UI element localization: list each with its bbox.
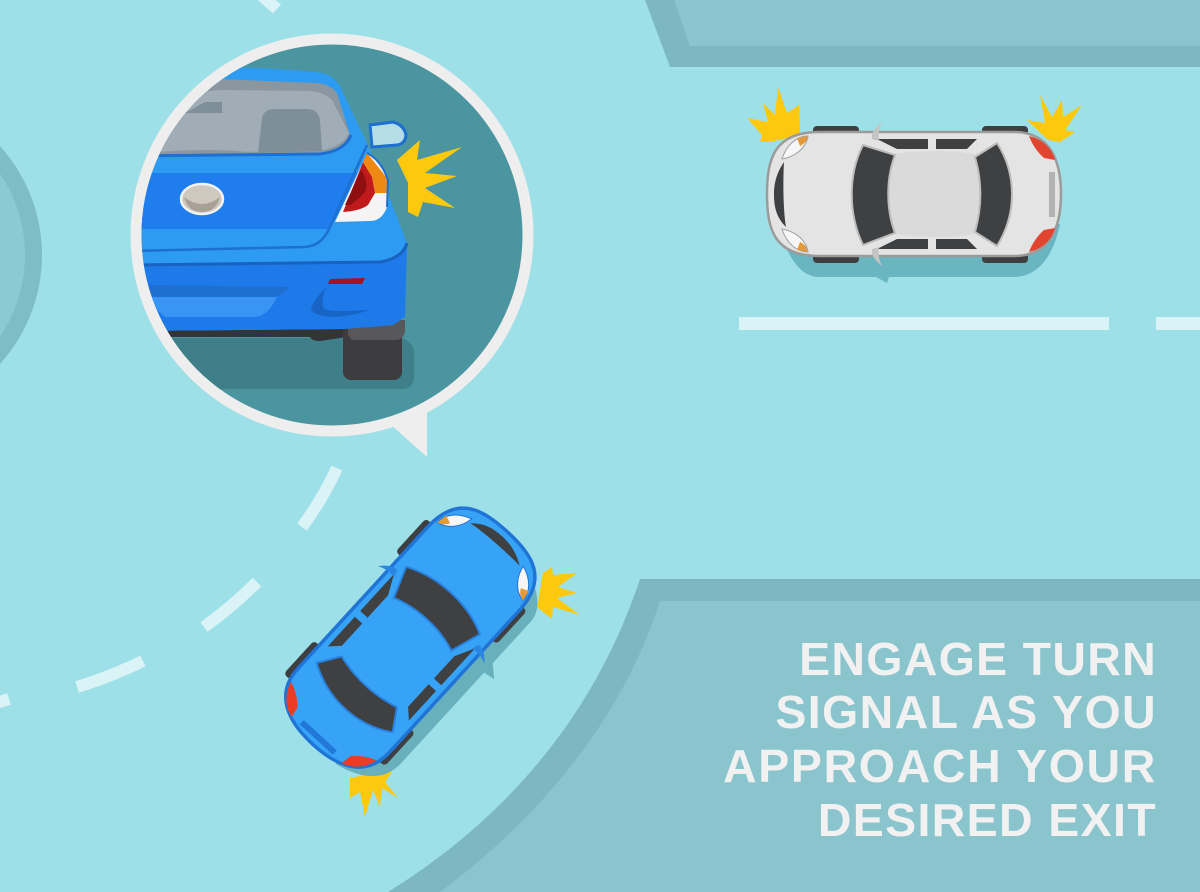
headline: ENGAGE TURN	[799, 633, 1157, 685]
white car headlights	[782, 136, 808, 252]
bumper reflector	[328, 278, 365, 284]
blue car rear window	[307, 647, 407, 743]
white car rear strip	[1049, 172, 1055, 217]
blue car body	[267, 490, 553, 786]
callout tail	[390, 408, 427, 457]
lane markings	[0, 0, 1200, 703]
blue car side mirrors	[378, 559, 491, 664]
bottom right sidewalk	[388, 579, 1200, 892]
tire	[343, 325, 402, 380]
headline	[723, 633, 1157, 846]
white car windshield	[852, 145, 895, 245]
zoomed car rear	[120, 67, 462, 389]
signal burst: blue car rear	[350, 770, 398, 817]
blue car shadow	[335, 560, 566, 804]
headline: SIGNAL AS YOU	[775, 686, 1157, 738]
bumper recess	[311, 287, 370, 317]
fuel emblem	[181, 184, 223, 214]
rear seat headrest	[258, 109, 322, 153]
window seal	[130, 135, 351, 156]
blue car rear strip	[300, 720, 337, 755]
underbody	[166, 328, 344, 341]
white car rear window	[975, 143, 1012, 246]
white car front grille	[774, 162, 786, 227]
blue car side windows	[328, 574, 475, 721]
signal burst: white car rear	[1027, 95, 1082, 142]
ground shadow	[172, 338, 414, 389]
white car roof	[883, 151, 983, 237]
bumper	[130, 243, 407, 331]
taillight	[335, 153, 388, 222]
bumper crease	[130, 243, 407, 265]
callout circle	[136, 39, 528, 431]
car body	[120, 67, 407, 331]
blue car tires	[284, 518, 527, 766]
white car taillights	[1029, 136, 1055, 252]
wing mirror	[370, 122, 406, 147]
blue car headlights	[437, 503, 540, 601]
blue car	[260, 483, 574, 805]
blue car windshield	[385, 559, 487, 657]
white car	[767, 122, 1061, 283]
side headrest	[186, 102, 223, 113]
white car tires	[813, 126, 1028, 263]
white car shadow	[778, 224, 1060, 283]
white car side windows	[877, 139, 977, 249]
tire upper	[348, 320, 405, 340]
signal burst: zoomed	[397, 140, 462, 217]
white car side mirrors	[872, 122, 882, 266]
headline: DESIRED EXIT	[818, 794, 1157, 846]
trunk edge	[130, 145, 367, 251]
rear window	[160, 79, 350, 154]
blue car taillights	[274, 682, 377, 779]
magnifier callout	[120, 39, 528, 457]
bumper dark strip	[143, 285, 290, 297]
trunk panel	[130, 173, 360, 229]
signal burst: blue car front	[537, 567, 580, 619]
roundabout central island	[0, 93, 42, 417]
headline: APPROACH YOUR	[723, 740, 1157, 792]
top right sidewalk	[645, 0, 1200, 67]
bumper light strip	[143, 297, 277, 317]
white car body	[767, 132, 1061, 256]
blue car front grille	[470, 515, 526, 567]
signal burst: white car front	[747, 87, 800, 142]
